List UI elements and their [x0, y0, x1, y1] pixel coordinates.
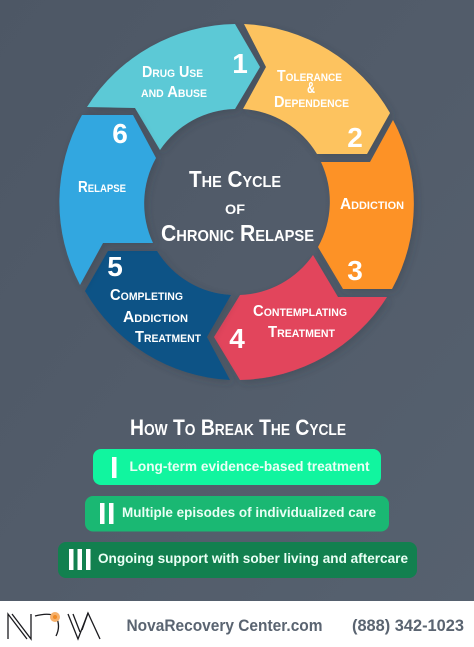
website: NovaRecovery Center.com [126, 616, 322, 635]
step I [93, 449, 381, 485]
step III: Ongoing support with sober living and aftercare [98, 550, 408, 566]
segment 2: tolerance and dependence: 2 [347, 122, 363, 153]
segment 1: drug use and abuse: Drug Use [142, 64, 203, 81]
segment 5: completing addiction treatment: Completing [110, 287, 183, 304]
phone: (888) 342-1023 [352, 616, 464, 635]
segment 2: tolerance and dependence: & [307, 80, 315, 97]
segment 6: relapse: 6 [112, 118, 128, 149]
segment 2: tolerance and dependence: Dependence [274, 94, 349, 111]
step III [58, 542, 417, 578]
center title [161, 166, 314, 246]
segment 3: addiction [318, 120, 414, 289]
segment 1: drug use and abuse: 1 [232, 48, 248, 79]
segment 2: tolerance and dependence: Tolerance [277, 68, 342, 85]
segment 1: drug use and abuse [87, 24, 260, 150]
segment 5: completing addiction treatment: Addiction [123, 309, 188, 326]
segment 4: contemplating treatment: 4 [229, 323, 245, 354]
segment 4: contemplating treatment: Treatment [268, 324, 335, 341]
segment 5: completing addiction treatment: Treatment [135, 329, 201, 346]
segment 6: relapse [59, 115, 156, 285]
step II: Multiple episodes of individualized care [122, 504, 376, 520]
step II [85, 496, 389, 532]
segment 2: tolerance and dependence [243, 24, 390, 154]
segment 6: relapse: Relapse [78, 179, 126, 196]
segment 3: addiction: 3 [347, 255, 363, 286]
heading: how to break the cycle: How To Break The Cycle [130, 415, 346, 440]
step I: Long-term evidence-based treatment [130, 458, 370, 474]
footer band [0, 601, 474, 647]
segment 4: contemplating treatment: Contemplating [253, 303, 347, 320]
cycle diagram [59, 24, 414, 380]
segment 5: completing addiction treatment [85, 251, 231, 380]
segment 1: drug use and abuse: and Abuse [141, 84, 207, 101]
segment 5: completing addiction treatment: 5 [107, 251, 123, 282]
center title: of [225, 197, 245, 219]
center title: Chronic Relapse [161, 220, 314, 246]
segment 3: addiction: Addiction [340, 196, 404, 213]
center title: The Cycle [189, 166, 281, 192]
logo: nova [8, 612, 100, 639]
segment 4: contemplating treatment [214, 255, 387, 380]
